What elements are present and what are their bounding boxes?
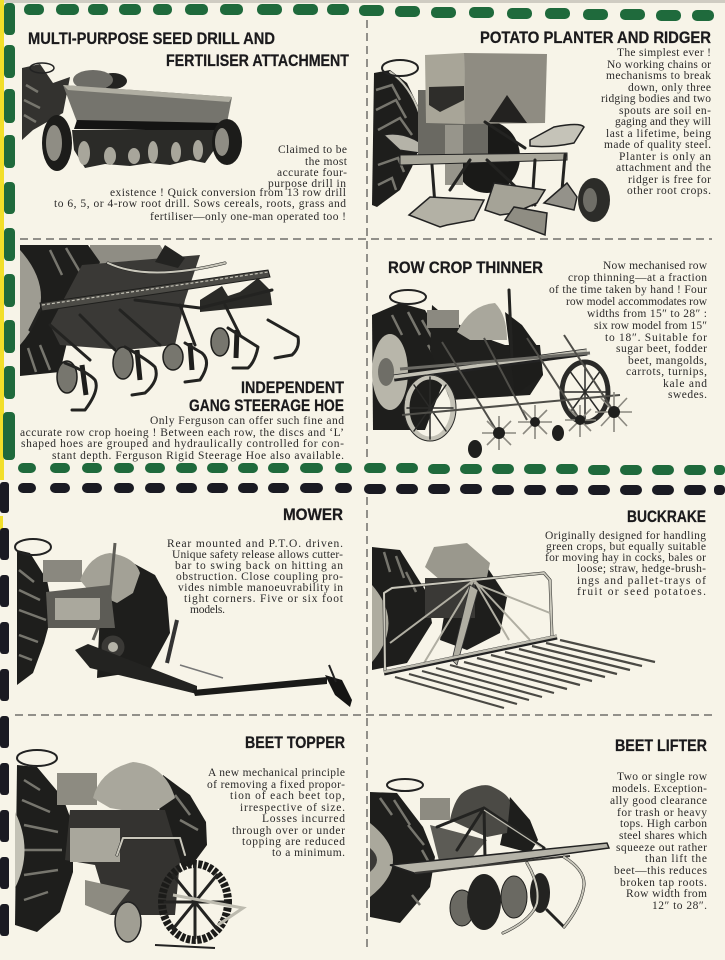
body text: mower: Rear mounted and P.T.O. driven. bbox=[167, 538, 343, 550]
body text: beet topper: topping are reduced bbox=[242, 836, 345, 848]
green dashed border: left bbox=[3, 3, 15, 460]
body text: potato planter: attachment and the bbox=[616, 162, 711, 174]
body text: mower: Unique safety release allows cutter- bbox=[172, 549, 343, 561]
body text: hoe bbox=[20, 415, 344, 462]
body text: beet lifter: ally good clearance bbox=[610, 795, 707, 807]
body text: seed drill: the most bbox=[305, 156, 348, 168]
body text: potato planter bbox=[601, 47, 711, 197]
body text: mower: tight corners. Five or six foot bbox=[184, 593, 344, 605]
body text: mower bbox=[167, 538, 344, 616]
panel: beet topper bbox=[15, 733, 345, 948]
body text: buckrake: loose; straw, hedge-brush- bbox=[577, 563, 706, 575]
body text: mower: obstruction. Close coupling pro- bbox=[176, 571, 343, 583]
body text: beet lifter: 12″ to 28″. bbox=[652, 900, 707, 912]
heading: mower: MOWER bbox=[283, 505, 343, 524]
heading: beet topper: BEET TOPPER bbox=[245, 733, 345, 752]
panel: potato planter bbox=[372, 28, 711, 235]
heading: buckrake: BUCKRAKE bbox=[627, 507, 706, 526]
body text: seed drill: fertiliser—only one-man operated too ! bbox=[150, 211, 346, 223]
body text: potato planter: No working chains or bbox=[607, 59, 711, 71]
body text: potato planter: other root crops. bbox=[627, 185, 711, 197]
body text: seed drill: purpose drill in bbox=[268, 178, 346, 190]
black dashed band: middle bbox=[18, 483, 725, 495]
illustration: hoe bbox=[20, 245, 298, 410]
body text: mower: bar to swing back on hitting an bbox=[175, 560, 343, 572]
panel: beet lifter bbox=[370, 736, 708, 933]
body text: thinner: swedes. bbox=[668, 389, 707, 401]
body text: hoe: accurate row crop hoeing ! Between each row, the discs and ‘L’ bbox=[20, 427, 344, 439]
body text: buckrake: ings and pallet-trays of bbox=[577, 575, 706, 587]
illustration: potato planter bbox=[372, 53, 610, 235]
body text: thinner: widths from 15″ to 28″ : bbox=[587, 308, 707, 320]
body text: thinner: beet, mangolds, bbox=[628, 355, 707, 367]
body text: thinner bbox=[549, 260, 708, 401]
body text: buckrake: Originally designed for handling bbox=[545, 530, 706, 542]
body text: beet lifter bbox=[610, 771, 708, 912]
body text: beet lifter: Two or single row bbox=[617, 771, 708, 783]
body text: beet topper: to a minimum. bbox=[272, 847, 345, 859]
heading: hoe: GANG STEERAGE HOE bbox=[189, 396, 344, 415]
heading: hoe: INDEPENDENT bbox=[241, 378, 345, 397]
body text: beet lifter: broken tap roots. bbox=[620, 877, 707, 889]
black dashed border: left bbox=[0, 482, 9, 936]
body text: potato planter: gaging and they will bbox=[615, 116, 711, 128]
body text: seed drill: existence ! Quick conversion from 13 row drill bbox=[110, 187, 346, 199]
heading: thinner: ROW CROP THINNER bbox=[388, 258, 543, 277]
body text: potato planter: spouts are soil en- bbox=[619, 105, 711, 117]
body text: thinner: of the time taken by hand ! Four bbox=[549, 284, 707, 296]
panel: gang steerage hoe bbox=[20, 245, 345, 462]
body text: hoe: stant depth. Ferguson Rigid Steerage Hoe also available. bbox=[52, 450, 344, 462]
panel: buckrake bbox=[372, 507, 706, 708]
heading: seed drill: FERTILISER ATTACHMENT bbox=[166, 51, 350, 70]
body text: thinner: crop thinning—at a fraction bbox=[568, 272, 707, 284]
body text: beet lifter: beet—this reduces bbox=[614, 865, 708, 877]
body text: buckrake bbox=[545, 530, 706, 598]
body text: beet lifter: steel shares which bbox=[619, 830, 707, 842]
body text: buckrake: for moving hay in cocks, bales or bbox=[545, 552, 706, 564]
body text: thinner: to 18″. Suitable for bbox=[605, 332, 707, 344]
body text: beet topper: tion of each beet top, bbox=[230, 790, 345, 802]
body text: hoe: Only Ferguson can offer such fine and bbox=[150, 415, 344, 427]
body text: hoe: shaped hoes are grouped and hydraulically controlled for con- bbox=[21, 438, 344, 450]
body text: mower: models. bbox=[190, 604, 225, 616]
body text: beet lifter: models. Exception- bbox=[612, 783, 707, 795]
heading: beet lifter: BEET LIFTER bbox=[615, 736, 707, 755]
body text: buckrake: green crops, but equally suitable bbox=[546, 541, 706, 553]
body text: seed drill bbox=[54, 144, 348, 223]
body text: thinner: row model accommodates row bbox=[566, 296, 708, 308]
panel: row crop thinner bbox=[372, 258, 708, 458]
body text: potato planter: mechanisms to break bbox=[606, 70, 711, 82]
body text: beet lifter: than lift the bbox=[645, 853, 707, 865]
heading: hoe bbox=[189, 378, 345, 415]
body text: beet topper: A new mechanical principle bbox=[208, 767, 345, 779]
body text: potato planter: last a lifetime, being bbox=[606, 128, 711, 140]
illustration: seed drill bbox=[22, 63, 242, 171]
panel: mower bbox=[15, 505, 352, 707]
body text: thinner: kale and bbox=[663, 378, 707, 390]
body text: mower: vides nimble manoeuvrability in bbox=[178, 582, 343, 594]
body text: potato planter: ridger is free for bbox=[628, 174, 711, 186]
illustration: beet lifter bbox=[370, 779, 609, 933]
body text: thinner: carrots, turnips, bbox=[626, 366, 707, 378]
body text: thinner: sugar beet, fodder bbox=[616, 343, 707, 355]
green dashed band: middle bbox=[18, 463, 725, 475]
body text: potato planter: made of quality steel. bbox=[604, 139, 711, 151]
body text: beet lifter: tops. High carbon bbox=[620, 818, 707, 830]
body text: potato planter: down, only three bbox=[628, 82, 711, 94]
body text: beet lifter: for trash or heavy bbox=[617, 807, 707, 819]
body text: beet topper: through over or under bbox=[232, 825, 345, 837]
body text: beet lifter: squeeze out rather bbox=[616, 842, 707, 854]
illustration: beet topper bbox=[15, 750, 243, 948]
illustration: mower bbox=[15, 539, 352, 707]
body text: thinner: six row model from 15″ bbox=[594, 320, 707, 332]
body text: beet topper: of removing a fixed propor- bbox=[207, 779, 345, 791]
body text: seed drill: Claimed to be bbox=[278, 144, 347, 156]
illustration: buckrake bbox=[372, 543, 655, 708]
heading: seed drill: MULTI-PURPOSE SEED DRILL AND bbox=[28, 29, 275, 48]
body text: potato planter: The simplest ever ! bbox=[617, 47, 711, 59]
body text: beet topper bbox=[207, 767, 345, 859]
illustration: thinner bbox=[372, 290, 632, 458]
body text: beet lifter: Row width from bbox=[626, 888, 707, 900]
body text: potato planter: Planter is only an bbox=[619, 151, 711, 163]
body text: thinner: Now mechanised row bbox=[603, 260, 708, 272]
green dashed border: top bbox=[24, 4, 714, 21]
body text: beet topper: irrespective of size. bbox=[240, 802, 345, 814]
panel: seed drill bbox=[22, 29, 350, 223]
body text: buckrake: fruit or seed potatoes. bbox=[577, 586, 706, 598]
body text: seed drill: accurate four- bbox=[277, 167, 347, 179]
heading: seed drill bbox=[28, 29, 350, 70]
body text: beet topper: Losses incurred bbox=[262, 813, 345, 825]
body text: potato planter: ridging bodies and two bbox=[601, 93, 711, 105]
body text: seed drill: to 6, 5, or 4-row root drill. Sows cereals, roots, grass and bbox=[54, 198, 346, 210]
